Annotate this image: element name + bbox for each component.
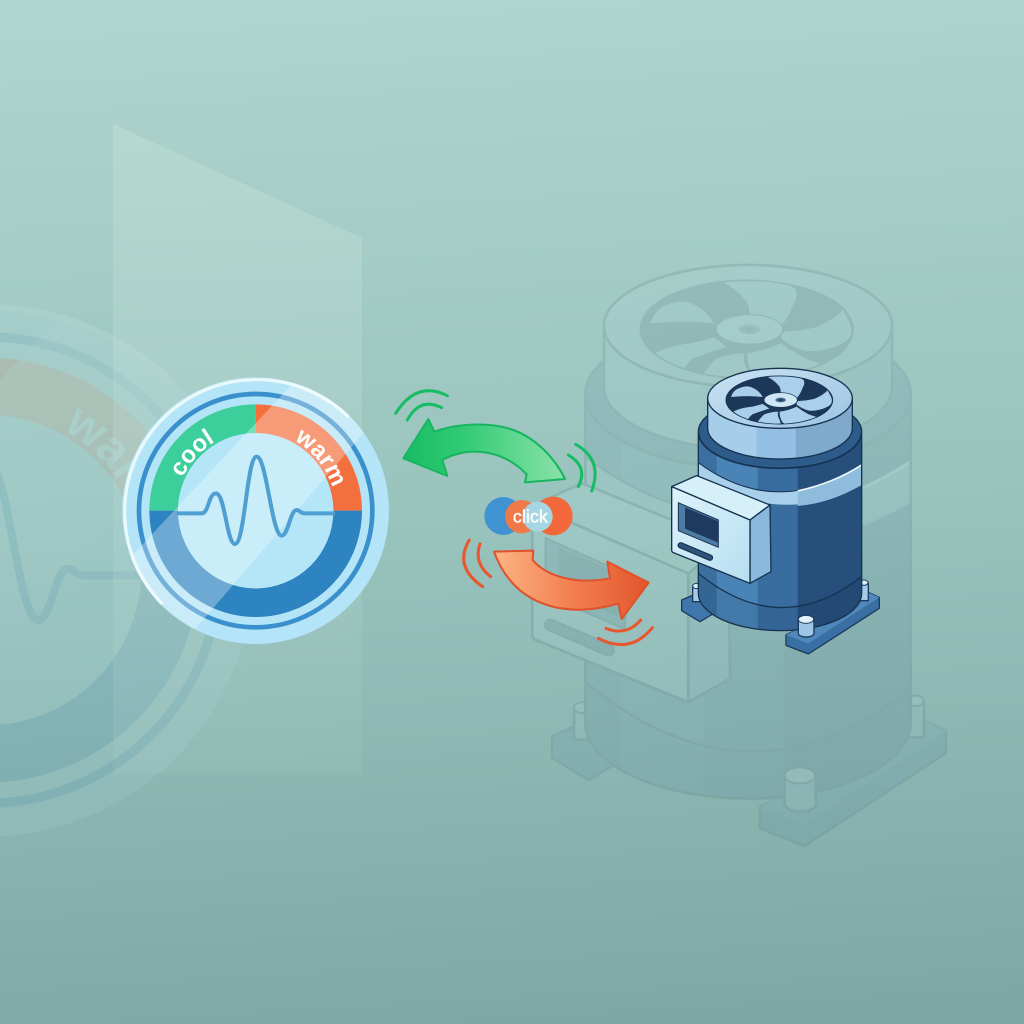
ghost compressor backdrop [532,265,946,846]
feedback arrows and click [396,391,652,645]
ghost glass panel [113,124,362,773]
label: warm: warm [296,430,343,486]
orange arrow pointing to compressor [494,551,649,619]
green signal waves [396,391,595,491]
green arrow pointing to gauge [403,419,565,482]
ghost gauge backdrop: warm [68,408,132,478]
click badge [484,497,573,535]
click badge: click [513,507,549,527]
orange signal waves [464,540,652,645]
compressor unit [672,368,879,654]
gauge dial [122,377,389,644]
label: cool: cool [174,428,214,475]
